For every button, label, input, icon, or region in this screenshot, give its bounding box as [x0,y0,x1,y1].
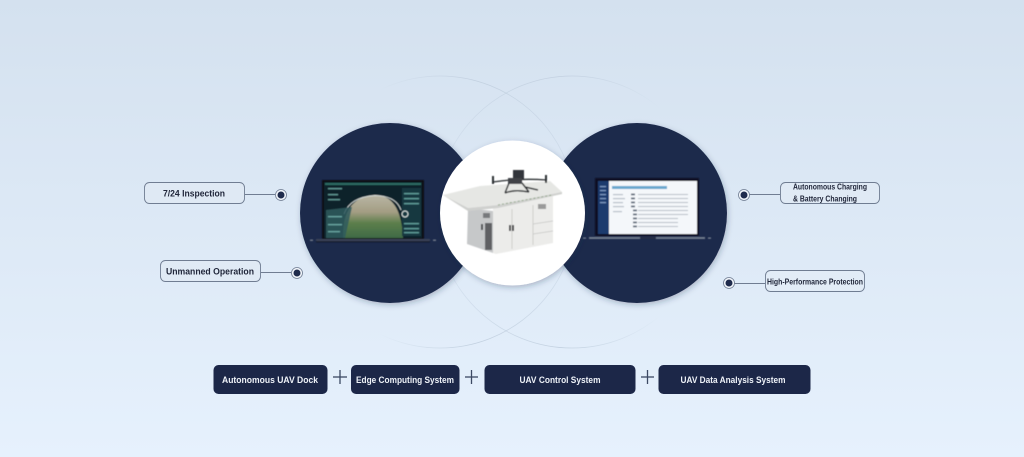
button: UAV Data Analysis System: UAV Data Analysis System [680,375,786,386]
button: UAV Data Analysis System [658,365,810,394]
icon: marker dot [276,190,286,200]
icon: marker dot [738,190,750,200]
icon: plus [465,370,478,384]
button: Autonomous UAV Dock [214,365,328,394]
icon: plus [333,370,347,384]
callout: 7/24 Inspection: 7/24 Inspection [163,188,225,198]
icon: laptop with data table [583,178,711,239]
button: Edge Computing System: Edge Computing System [356,375,454,386]
panel: right dark circle with laptop [547,123,727,303]
callout: Autonomous Charging & Battery Changing: Autonomous Charging [793,182,867,192]
button: Autonomous UAV Dock: Autonomous UAV Dock [222,375,319,386]
icon: marker dot [724,278,734,288]
button: Edge Computing System [351,365,460,394]
icon: laptop with globe dashboard [310,180,436,242]
callout: Unmanned Operation [160,260,302,282]
callout: High-Performance Protection: High-Performance Protection [767,276,863,286]
button: UAV Control System: UAV Control System [520,375,600,386]
callout: High-Performance Protection [724,270,864,292]
button: UAV Control System [484,365,636,394]
callout: Autonomous Charging & Battery Changing: & Battery Changing [793,194,857,204]
callout: Unmanned Operation: Unmanned Operation [166,266,254,276]
faint orbit rings [304,76,708,348]
panel: left dark circle with laptop [300,123,480,303]
icon: UAV dock with drone [443,170,562,254]
icon: marker dot [292,268,302,278]
panel: center white circle with dock [440,140,585,286]
callout: 7/24 Inspection [144,182,286,204]
icon: plus [641,370,654,384]
callout: Autonomous Charging & Battery Changing [738,182,880,204]
